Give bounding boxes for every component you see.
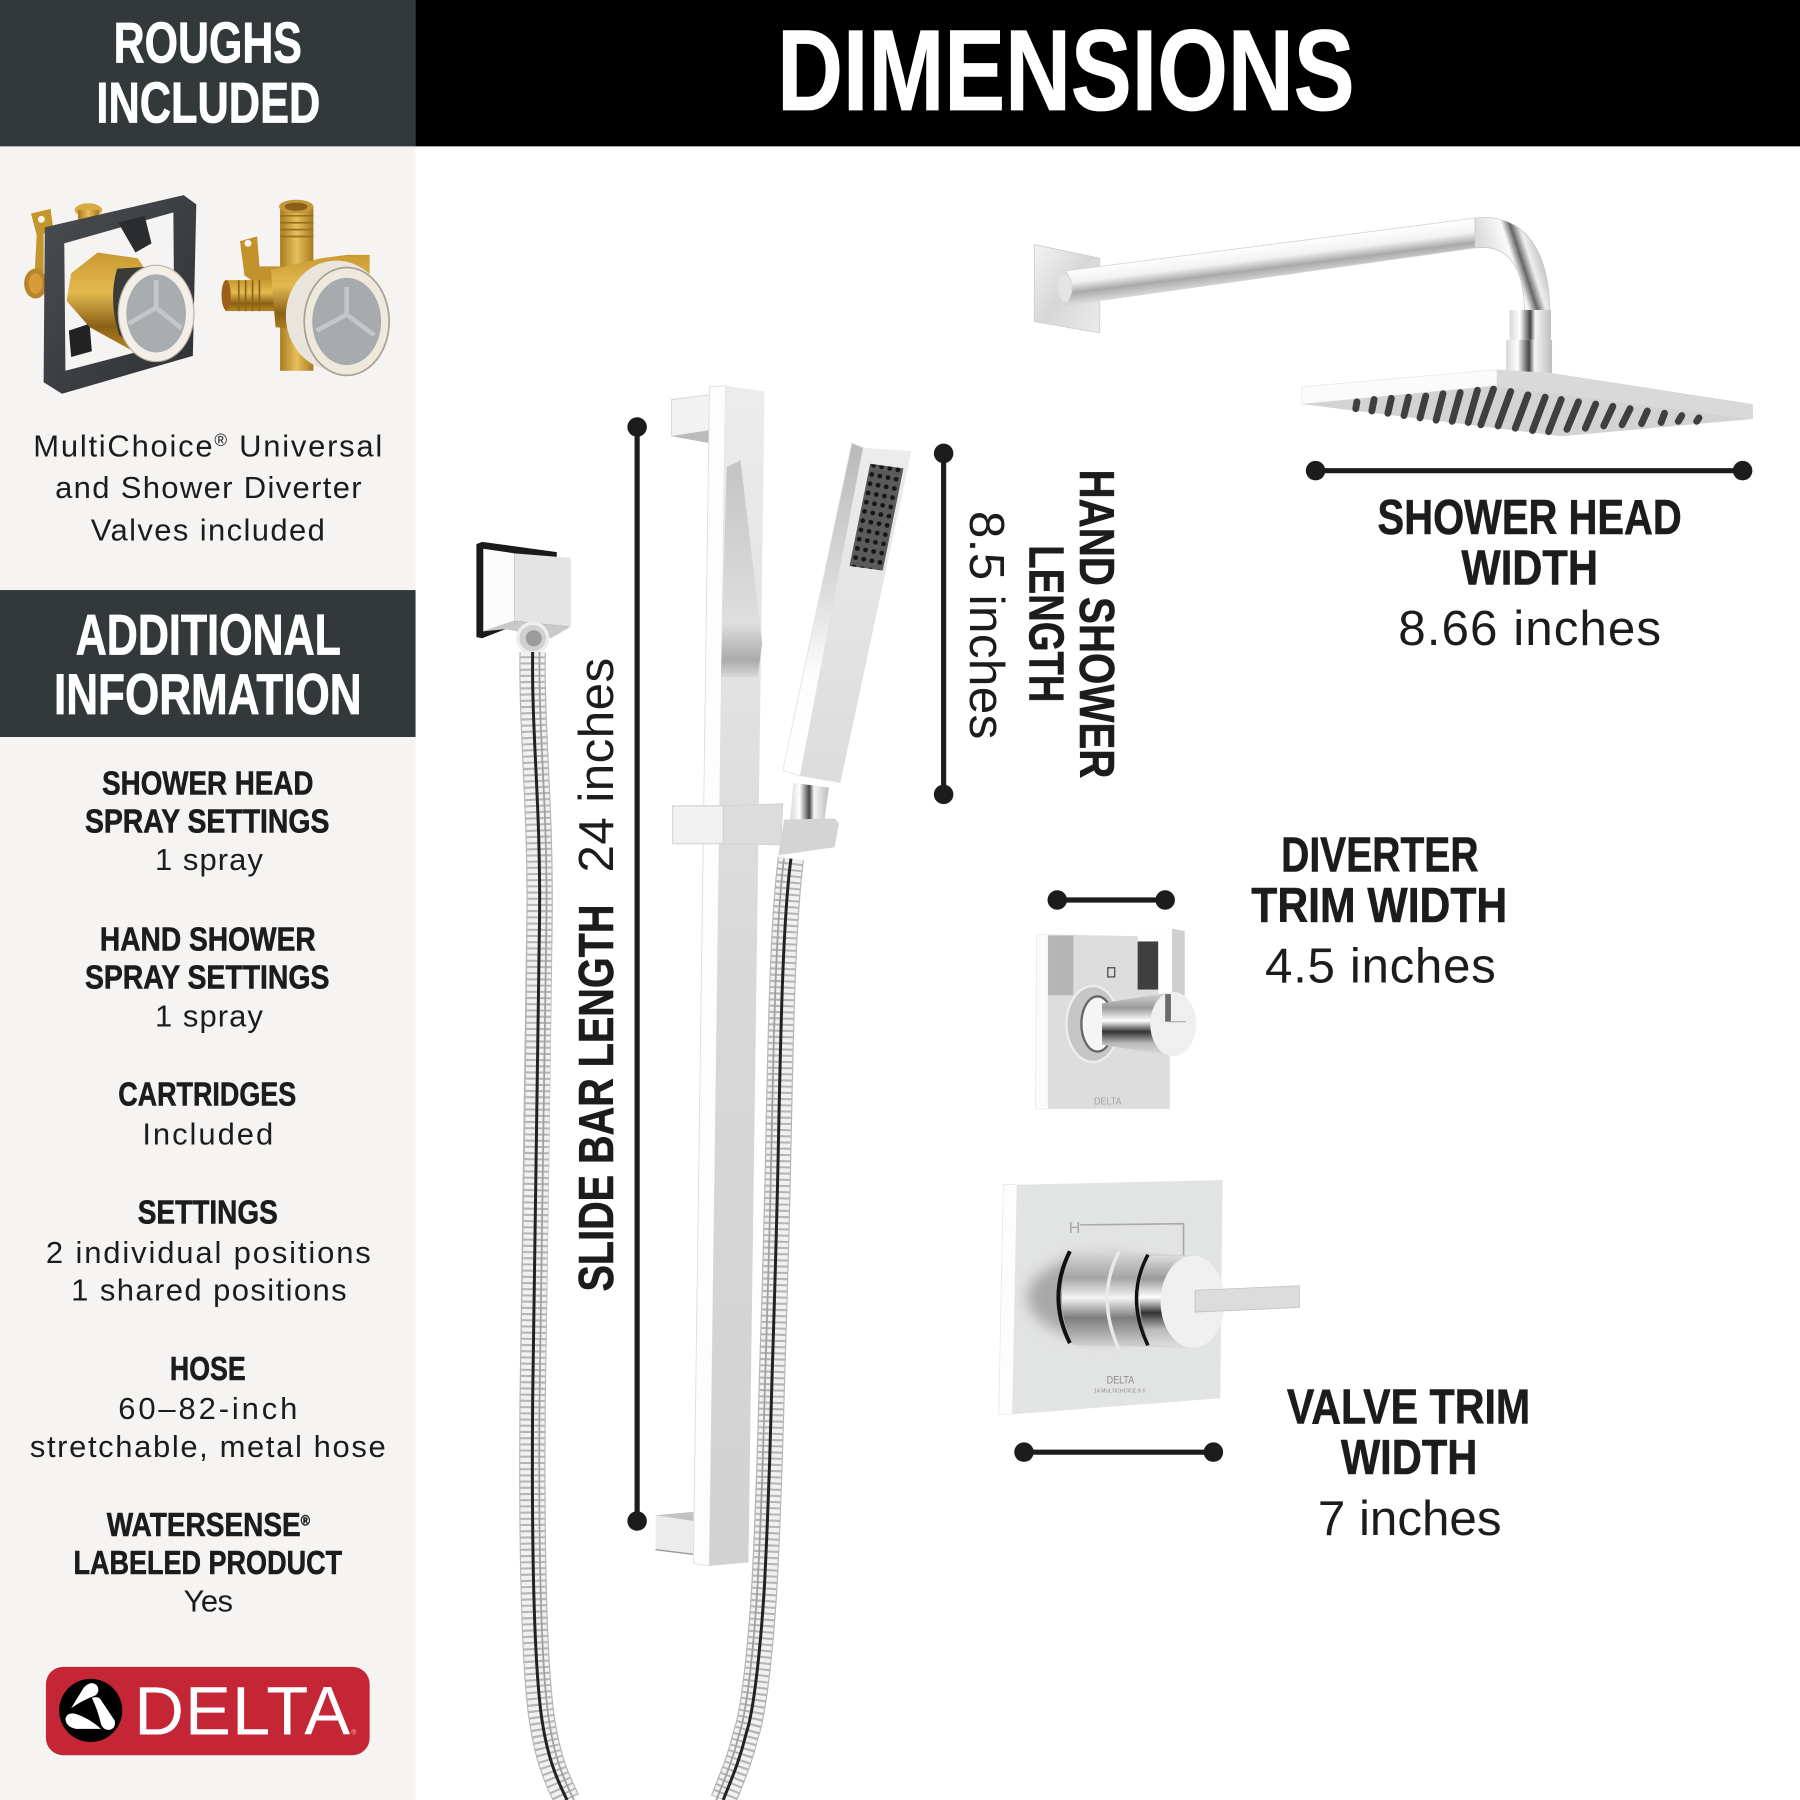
spec: shower head spray settings bbox=[85, 765, 329, 877]
text: diverter trim width: TRIM WIDTH bbox=[1251, 878, 1507, 933]
header: dimensions bbox=[416, 0, 1800, 146]
image: right hose bbox=[716, 859, 791, 1800]
header: roughs included: ROUGHS bbox=[114, 12, 302, 76]
image: valve trim: H bbox=[1069, 1219, 1080, 1237]
header: additional information: ADDITIONAL bbox=[76, 603, 341, 667]
dimension line: shower head width bbox=[1306, 461, 1752, 480]
text: valve trim width bbox=[1287, 1379, 1530, 1546]
text: shower head width bbox=[1378, 490, 1682, 656]
logo: delta bbox=[46, 1667, 370, 1755]
header: roughs included bbox=[0, 0, 416, 146]
text: valve trim width: VALVE TRIM bbox=[1287, 1379, 1530, 1434]
text: diverter trim width: 4.5 inches bbox=[1265, 939, 1496, 994]
spec: watersense: WATERSENSE bbox=[107, 1507, 337, 1544]
text: hand shower length: LENGTH bbox=[1019, 545, 1074, 703]
text: slide bar length: SLIDE BAR LENGTH bbox=[569, 905, 624, 1291]
dimension line: slide bar length bbox=[627, 417, 647, 1531]
image: brass diverter valve bbox=[222, 200, 389, 375]
dimension line: hand shower length bbox=[934, 444, 953, 804]
text: valves caption bbox=[33, 428, 382, 548]
logo: delta: ® bbox=[351, 1729, 356, 1737]
text: valve trim width: 7 inches bbox=[1318, 1491, 1502, 1546]
spec: cartridges: Included bbox=[142, 1117, 273, 1152]
spec: watersense bbox=[73, 1507, 342, 1619]
text: valves caption: and Shower Diverter bbox=[55, 470, 362, 505]
text: valve trim width: WIDTH bbox=[1341, 1430, 1477, 1485]
spec: hose: stretchable, metal hose bbox=[30, 1429, 386, 1464]
image: diverter trim: DELTA bbox=[1094, 1096, 1122, 1107]
text: valves caption: Universal bbox=[229, 428, 382, 463]
spec: watersense: Yes bbox=[184, 1584, 233, 1619]
background sidebar bbox=[0, 0, 416, 1800]
spec: hand shower spray settings: SPRAY SETTINGS bbox=[85, 959, 329, 996]
image: rough valve with mounting frame bbox=[24, 195, 196, 394]
spec: watersense: ® bbox=[301, 1513, 310, 1530]
image: slide bar bbox=[655, 386, 783, 1566]
text: valves caption: MultiChoice bbox=[33, 428, 213, 463]
image: hand shower bbox=[778, 443, 911, 855]
dimension line: valve trim width bbox=[1014, 1442, 1223, 1462]
header: additional information: INFORMATION bbox=[54, 663, 362, 727]
text: diverter trim width: DIVERTER bbox=[1281, 827, 1479, 882]
image: left hose bbox=[532, 652, 574, 1800]
spec: shower head spray settings: 1 spray bbox=[155, 842, 263, 877]
spec: hose: 60–82-inch bbox=[118, 1391, 297, 1426]
image: diverter trim bbox=[1035, 929, 1196, 1109]
dimension line: diverter trim width bbox=[1048, 890, 1175, 910]
image: valve trim bbox=[999, 1180, 1299, 1414]
spec: hose bbox=[30, 1351, 386, 1464]
header: additional information bbox=[0, 590, 416, 737]
image: shower arm and rain head bbox=[1034, 217, 1753, 436]
spec: hose: HOSE bbox=[170, 1351, 246, 1388]
spec: settings: SETTINGS bbox=[138, 1195, 278, 1232]
image: wall elbow mount bbox=[476, 542, 571, 653]
text: shower head width: WIDTH bbox=[1461, 540, 1598, 595]
text: hand shower length: HAND SHOWER bbox=[1069, 470, 1124, 778]
spec: settings bbox=[46, 1195, 371, 1308]
text: valves caption: Valves included bbox=[91, 513, 325, 548]
spec: watersense: LABELED PRODUCT bbox=[73, 1545, 342, 1582]
image: valve trim: DELTA bbox=[1107, 1374, 1134, 1386]
spec: cartridges: CARTRIDGES bbox=[118, 1076, 296, 1113]
spec: shower head spray settings: SPRAY SETTINGS bbox=[85, 803, 329, 840]
spec: settings: 1 shared positions bbox=[71, 1273, 347, 1308]
image: valve trim: 14 MULTICHOICE ® II bbox=[1094, 1387, 1146, 1394]
text: hand shower length bbox=[959, 470, 1124, 778]
spec: cartridges bbox=[118, 1076, 296, 1152]
logo: delta: DELTA bbox=[134, 1673, 350, 1750]
text: shower head width: 8.66 inches bbox=[1398, 601, 1661, 656]
text: diverter trim width bbox=[1251, 827, 1507, 994]
text: slide bar length: 24 inches bbox=[569, 658, 624, 872]
spec: shower head spray settings: SHOWER HEAD bbox=[102, 765, 313, 802]
header: dimensions: DIMENSIONS bbox=[777, 7, 1355, 135]
text: shower head width: SHOWER HEAD bbox=[1378, 490, 1682, 545]
header: roughs included: INCLUDED bbox=[96, 71, 320, 135]
spec: settings: 2 individual positions bbox=[46, 1235, 371, 1270]
text: valves caption: ® bbox=[214, 430, 227, 450]
spec: hand shower spray settings bbox=[85, 922, 329, 1033]
spec: hand shower spray settings: 1 spray bbox=[155, 998, 263, 1033]
spec: hand shower spray settings: HAND SHOWER bbox=[100, 922, 316, 959]
text: hand shower length: 8.5 inches bbox=[959, 511, 1014, 739]
